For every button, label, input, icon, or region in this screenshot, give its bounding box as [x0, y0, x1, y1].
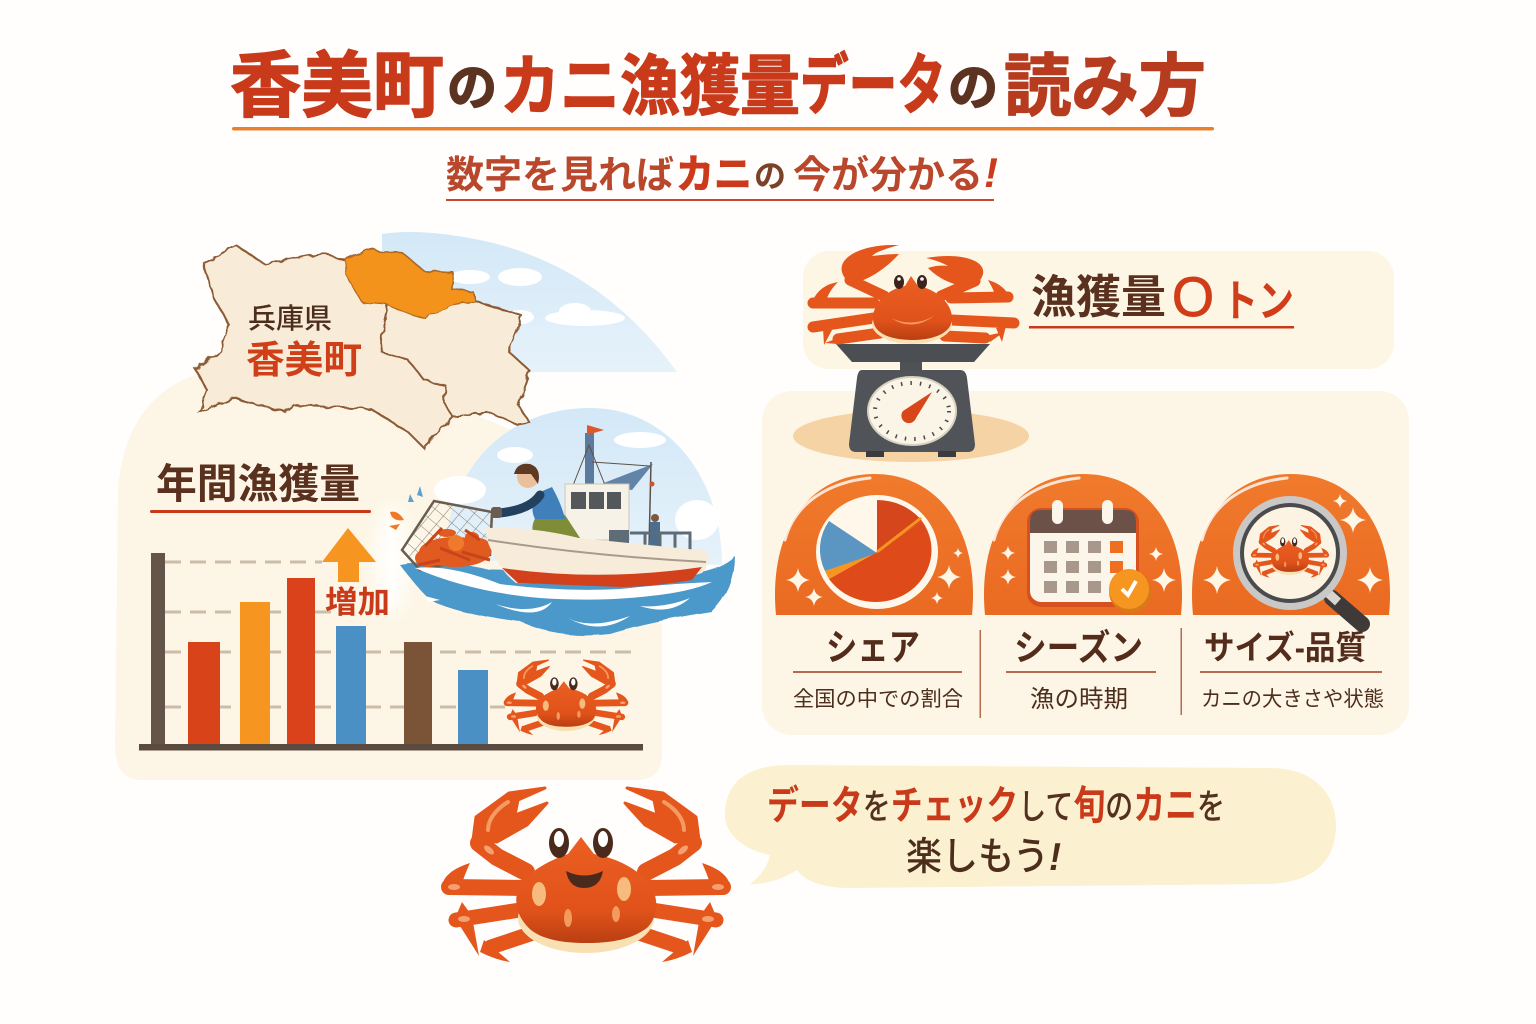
- title: 読み方: [1004, 49, 1206, 125]
- icon: season calendar: [984, 474, 1182, 615]
- subtitle: [446, 149, 998, 201]
- label: share: [793, 627, 963, 711]
- waves: [415, 567, 712, 627]
- label: Kami-cho: 香美町: [246, 340, 362, 382]
- subtitle: !: [984, 149, 998, 196]
- hull: [486, 528, 708, 587]
- label: increase: 増加: [325, 585, 390, 620]
- title: [230, 47, 1214, 130]
- map: Hyogo prefecture: [195, 246, 530, 448]
- heading: catch amount: 漁獲量: [1031, 271, 1166, 323]
- arrow: increase: [322, 528, 376, 582]
- illustration: scale: [793, 344, 1029, 462]
- fisherman: [491, 464, 580, 538]
- label: season: 漁の時期: [1030, 686, 1128, 713]
- icon: mascot crab: [443, 788, 729, 962]
- title: の: [447, 60, 497, 116]
- callout: speech bubble: データをチェックして旬のカニを: [767, 783, 1225, 828]
- callout: speech bubble: [725, 765, 1336, 888]
- bar chart: [139, 553, 643, 750]
- splash marks: [389, 486, 423, 530]
- label: share: 全国の中での割合: [793, 688, 963, 711]
- label: size and quality: [1200, 629, 1384, 711]
- subtitle: 今が分かる: [793, 155, 983, 197]
- title: の: [948, 60, 998, 116]
- icon: share pie chart: [775, 474, 973, 615]
- net: [402, 501, 492, 570]
- heading: catch amount: トン: [1222, 277, 1294, 326]
- label: size and quality: カニの大きさや状態: [1201, 688, 1384, 711]
- sky circle: [445, 408, 722, 565]
- map: Kami-cho highlighted area: [345, 250, 475, 319]
- heading: catch amount: O: [1172, 265, 1214, 328]
- panel: left background: [115, 375, 662, 780]
- mast and crane: [572, 425, 654, 548]
- title: カニ漁獲量: [500, 49, 800, 123]
- label: size and quality: サイズ-品質: [1204, 629, 1366, 666]
- rail and deck figure: [609, 514, 690, 550]
- title: データ: [800, 48, 946, 122]
- heading: catch amount: [1029, 265, 1294, 328]
- dial: [868, 377, 956, 445]
- callout: speech bubble: 楽しもう!: [906, 836, 1061, 879]
- label: season: シーズン: [1014, 627, 1143, 668]
- illustration: sky behind map: [382, 232, 677, 372]
- label: share: シェア: [826, 627, 920, 668]
- heading: annual catch: 年間漁獲量: [156, 461, 360, 507]
- subtitle: 数字を見れば: [446, 155, 674, 197]
- subtitle: カニ: [676, 153, 752, 197]
- label: Hyogo: 兵庫県: [248, 303, 332, 334]
- illustration: fishing boat: [389, 408, 735, 636]
- panel: catch amount: [803, 251, 1394, 369]
- title: 香美町: [230, 47, 444, 127]
- cabin: [565, 484, 629, 540]
- icon: small crab: [505, 660, 627, 735]
- water: [400, 556, 735, 636]
- subtitle: の: [754, 158, 786, 194]
- icon: crab on scale: [813, 245, 1014, 345]
- label: season: [1006, 627, 1156, 713]
- panel: data points: [762, 391, 1409, 735]
- icon: quality magnifier: [1192, 474, 1390, 624]
